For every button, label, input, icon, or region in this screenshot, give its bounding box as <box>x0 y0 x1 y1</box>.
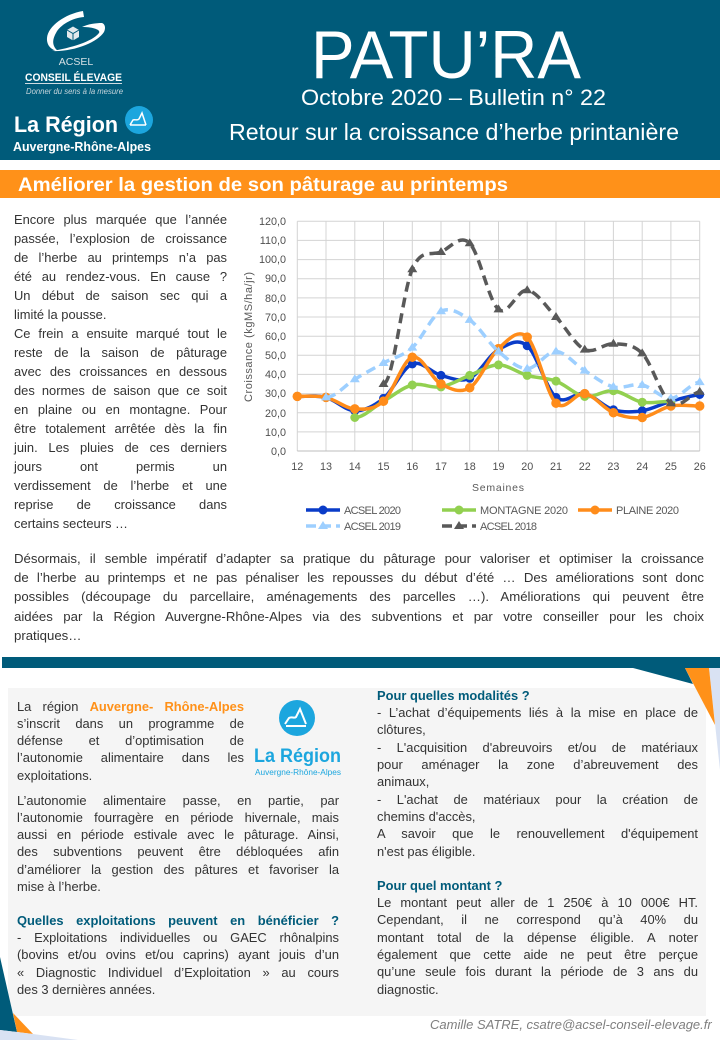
y axis labels: 60,0 <box>265 331 286 343</box>
y axis labels: 70,0 <box>265 312 286 324</box>
y axis labels: 20,0 <box>265 408 286 420</box>
text block: region intro: l’autonomie alimentaire dans les <box>17 750 244 765</box>
text block: autonomie: d’améliorer la gestion des pâtures et favoriser la <box>17 862 339 877</box>
subtitle: date and bulletin: Octobre 2020 – Bulletin n° 22 <box>301 85 606 110</box>
y axis labels: 0,0 <box>271 446 286 458</box>
chart legend: MONTAGNE 2020 <box>480 505 568 517</box>
text block: intro: Un début de saison sec qui a <box>14 288 227 303</box>
text block: modalites: pour aménager la zone d’abreuvement des <box>377 757 698 772</box>
chart legend: PLAINE 2020 <box>616 505 679 517</box>
series: MONTAGNE 2020 <box>355 365 671 418</box>
text block: autonomie: aussi en période estivale avec le pâturage. Ainsi, <box>17 827 339 842</box>
text block: modalites: animaux, <box>377 774 429 789</box>
heading: montant: Pour quel montant ? <box>377 878 502 892</box>
header band <box>0 0 720 160</box>
y axis labels: 80,0 <box>265 293 286 305</box>
text block: intro: Ce frein a ensuite marqué tout le <box>14 326 227 341</box>
text block: modalites: - L'acquisition d'abreuvoirs et/ou de matériaux <box>377 740 698 755</box>
x axis labels: 15 <box>377 461 390 473</box>
logo: ACSEL Conseil Elevage: Donner du sens à la mesure <box>26 87 124 96</box>
text block: modalites: clôtures, <box>377 722 426 737</box>
y axis labels: 120,0 <box>259 216 286 228</box>
chart legend <box>306 505 679 533</box>
chart legend: ACSEL 2020 <box>344 505 401 517</box>
x axis labels: 22 <box>579 461 591 473</box>
text block: region intro: La région Auvergne- Rhône-Alpes <box>17 698 244 714</box>
text block: intro: reste de la saison de pâturage <box>14 345 227 360</box>
subtitle: topic: Retour sur la croissance d’herbe printanière <box>229 119 679 145</box>
y axis labels: 100,0 <box>259 254 286 266</box>
axis title: croissance: Croissance (kgMS/ha/jr) <box>243 272 255 402</box>
heading: exploitations: Quelles exploitations peuvent en bénéficier ? <box>17 912 339 928</box>
series: ACSEL 2018 <box>378 238 705 406</box>
x axis labels: 12 <box>291 461 303 473</box>
text block: region intro: défense et d’optimisation de <box>17 733 244 748</box>
logo: ACSEL Conseil Elevage: ACSEL <box>59 56 93 68</box>
text block: montant: montant total de la dépense éligible. A noter <box>377 930 698 945</box>
text block: modalites: chemins d'accès, <box>377 809 475 824</box>
x axis labels: 16 <box>406 461 418 473</box>
text block: autonomie: l’autonomie fourragère en période hivernale, mais <box>17 810 339 825</box>
x axis labels: 14 <box>349 461 361 473</box>
x axis labels: 19 <box>492 461 505 473</box>
logo: La Région: La Région <box>14 112 118 137</box>
text block: modalites: - L'achat de matériaux pour la création de <box>377 792 698 807</box>
section banner <box>0 170 720 198</box>
logo: ACSEL Conseil Elevage <box>25 11 124 96</box>
logo: La Région <box>13 106 153 154</box>
chart legend: ACSEL 2018 <box>480 521 537 533</box>
chart legend: ACSEL 2019 <box>344 521 401 533</box>
text block: intro: verdissement de l’herbe et une <box>14 478 227 493</box>
x axis labels: 17 <box>435 461 447 473</box>
y axis labels: 40,0 <box>265 369 286 381</box>
text block: modalites: n'est pas éligible. <box>377 844 476 859</box>
text block: autonomie <box>17 792 340 894</box>
logo: La Région panel: La Région <box>254 746 341 767</box>
text block: conclusion: aidées par la Région Auvergne-Rhône-Alpes via des subventions et par votre conseiller pour les choix <box>14 609 704 624</box>
logo: La Région panel <box>254 700 341 777</box>
text block: intro: passée, l’explosion de croissance <box>14 231 227 246</box>
x axis labels: 25 <box>665 461 677 473</box>
y axis labels: 50,0 <box>265 350 286 362</box>
text block: intro: de l’herbe au printemps n’a pas <box>14 250 227 265</box>
y axis labels: 10,0 <box>265 427 286 439</box>
x axis labels: 21 <box>550 461 562 473</box>
text block: intro <box>14 212 228 531</box>
text block: intro: juin. Les pluies de ces derniers <box>14 440 227 455</box>
x axis labels: 23 <box>607 461 619 473</box>
logo: La Région panel: Auvergne-Rhône-Alpes <box>255 767 341 777</box>
text block: exploitations eligibles: - Exploitations individuelles ou GAEC rhônalpins <box>17 930 339 945</box>
header logos and title <box>0 11 720 198</box>
y axis labels: 30,0 <box>265 388 286 400</box>
text block: intro: avec des croissances en dessous <box>14 364 227 379</box>
text block: conclusion: de l’herbe au printemps et ne pas pénaliser les repousses du début d’été … Des améliorations sont donc <box>14 570 704 585</box>
text block: region intro <box>17 698 244 783</box>
panel: aides region <box>8 688 706 1016</box>
x axis labels <box>291 461 706 473</box>
y axis labels <box>259 216 286 458</box>
heading: modalites: Pour quelles modalités ? <box>377 688 530 702</box>
x axis labels: 20 <box>521 461 533 473</box>
text block: intro: en plaine ou en montagne. Pour <box>14 402 227 417</box>
y axis labels: 110,0 <box>260 235 286 247</box>
text block: montant <box>377 878 698 997</box>
y axis labels: 90,0 <box>265 273 286 285</box>
text block: intro: des normes de saison que ce soit <box>14 383 227 398</box>
text block: intro: être totalement arrêtée dès la fin <box>14 421 227 436</box>
text block: autonomie: mise à l’herbe. <box>17 879 101 894</box>
text block: modalites: A savoir que le renouvellement d'équipement <box>377 826 698 841</box>
text block: region intro: s’inscrit dans un programme de <box>17 716 244 731</box>
logo: La Région: Auvergne-Rhône-Alpes <box>13 140 151 154</box>
text block: intro: limité la pousse. <box>14 307 106 322</box>
text block: montant: Cependant, il ne correspond qu’à 40% du <box>377 912 698 927</box>
text block: conclusion: possibles (découpage du parcellaire, aménagements des parcelles …). Améliorations qui peuvent être <box>14 589 704 604</box>
text block: conclusion: pratiques… <box>14 628 81 643</box>
text block: autonomie: des subventions peuvent être débloquées afin <box>17 844 339 859</box>
line chart: croissance <box>243 216 706 533</box>
text block: exploitations eligibles <box>17 912 339 997</box>
text block: intro: reprise de croissance dans <box>14 497 227 512</box>
section banner: Améliorer la gestion de son pâturage au printemps <box>18 174 508 196</box>
x axis labels: 24 <box>636 461 648 473</box>
text block: intro: certains secteurs … <box>14 516 128 531</box>
series: PLAINE 2020 <box>297 334 700 418</box>
series: ACSEL 2020 <box>297 342 700 412</box>
x axis labels: 26 <box>694 461 706 473</box>
text block: montant: qu’une seule fois durant la période de 3 ans du <box>377 964 698 979</box>
text block: montant: diagnostic. <box>377 982 439 997</box>
text block: intro: jours ont permis un <box>14 459 227 474</box>
series: ACSEL 2019 <box>321 306 705 401</box>
text block: intro: Encore plus marquée que l’année <box>14 212 227 227</box>
text block: conclusion: Désormais, il semble impératif d’adapter sa pratique du pâturage pour valoriser et optimiser la croissance <box>14 551 704 566</box>
title: PATU’RA <box>311 17 582 93</box>
text block: montant: également que cette aide ne peut être perçue <box>377 947 698 962</box>
text block: exploitations eligibles: « Diagnostic Individuel d’Exploitation » au cours <box>17 965 339 980</box>
text block: conclusion <box>14 551 704 643</box>
text block: region intro: exploitations. <box>17 768 92 783</box>
text block: modalites: - L’achat d’équipements liés à la mise en place de <box>377 705 698 720</box>
text block: autonomie: L’autonomie alimentaire passe, en partie, par <box>17 792 339 808</box>
text block: modalites <box>377 688 698 859</box>
author credit: Camille SATRE, csatre@acsel-conseil-elevage.fr <box>430 1017 712 1032</box>
x axis labels: 13 <box>320 461 332 473</box>
axis title: semaines: Semaines <box>472 482 524 494</box>
text block: exploitations eligibles: (bovins et/ou ovins et/ou caprins) ayant jouis d’un <box>17 947 339 962</box>
text block: intro: été au rendez-vous. En cause ? <box>14 269 227 284</box>
text block: montant: Le montant peut aller de 1 250€ à 10 000€ HT. <box>377 895 698 910</box>
logo: ACSEL Conseil Elevage: CONSEIL ÉLEVAGE <box>25 71 122 84</box>
x axis labels: 18 <box>464 461 476 473</box>
text block: exploitations eligibles: des 3 dernières années. <box>17 982 155 997</box>
